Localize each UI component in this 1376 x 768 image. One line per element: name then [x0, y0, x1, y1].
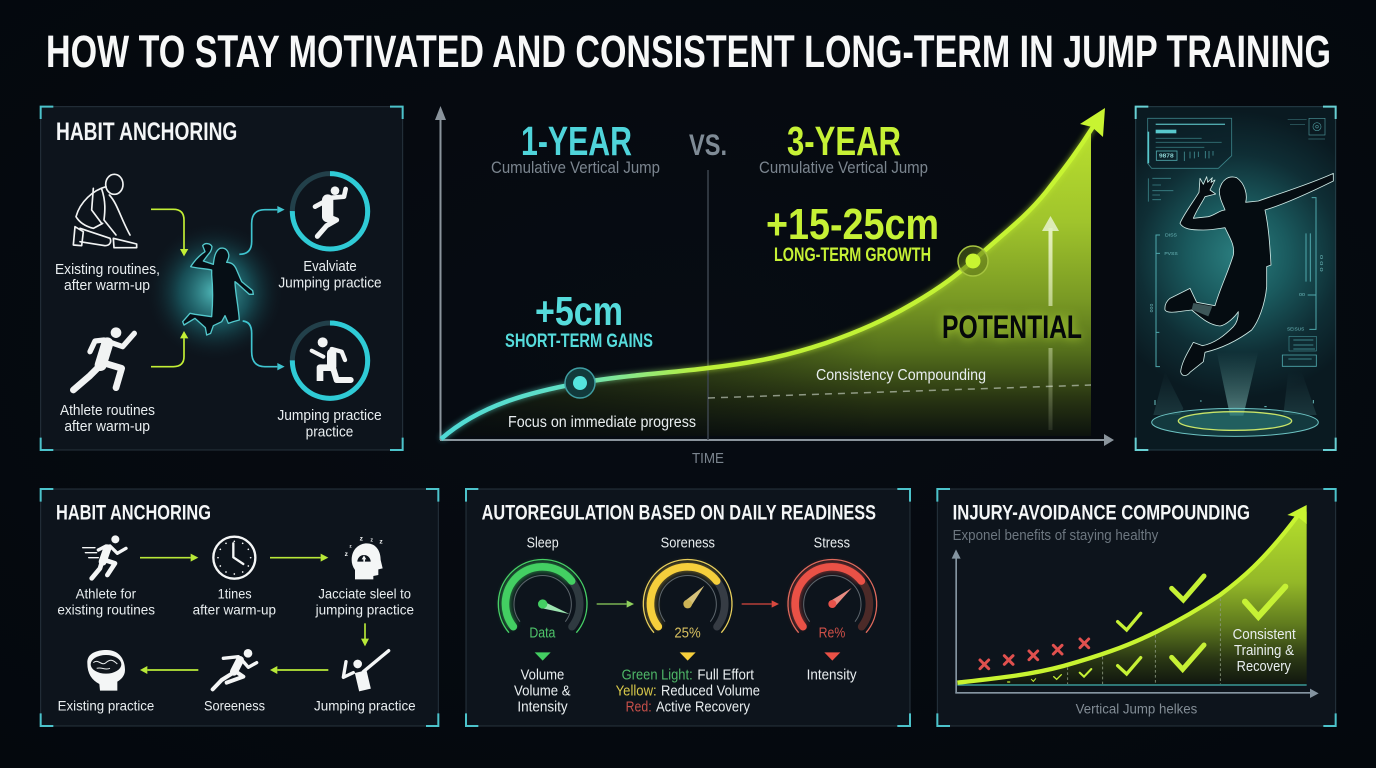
projector light beams [1153, 352, 1317, 416]
panel heading: INJURY-AVOIDANCE COMPOUNDING [953, 501, 1250, 524]
text: times after warm-up: 1tines [218, 585, 252, 601]
label: long-term growth: LONG-TERM GROWTH [774, 244, 931, 266]
panel heading: AUTOREGULATION BASED ON DAILY READINESS [482, 501, 876, 524]
chart axes [952, 549, 1319, 698]
panel: hero athlete hologram [1136, 107, 1336, 450]
text: volume and intensity [514, 667, 571, 716]
marker: one-year point [565, 368, 595, 398]
hud: left bracket [1156, 235, 1160, 367]
gauge labels: Sleep [527, 536, 559, 552]
gauge labels [527, 536, 850, 552]
hud labels: SEISUS [1287, 327, 1305, 333]
text: times after warm-up [193, 585, 276, 617]
text: athlete for existing routines: existing routines [57, 601, 155, 617]
note: focus on immediate progress: Focus on immediate progress [508, 414, 696, 431]
icon: head with brain [87, 650, 125, 691]
icon: head with gauge and sleep marks: z [360, 536, 364, 543]
axis label: Vertical Jump helkes [1076, 701, 1197, 716]
axis label: time: TIME [692, 450, 724, 467]
stat: +15-25cm: +15-25cm [766, 200, 939, 249]
arrow: jumper to evaluate [239, 206, 285, 254]
hud: top-right target [1288, 118, 1325, 139]
gauge labels: Soreness [661, 536, 715, 552]
arrow: jumper to practice [243, 321, 285, 370]
hud labels: 000 [1149, 303, 1155, 312]
gauge: stress [788, 559, 877, 633]
chart: area under curve [957, 512, 1307, 685]
text: athlete routines: Athlete routines [60, 402, 155, 419]
panel: habit anchoring (bottom left) [41, 489, 438, 726]
gauge: sleep [498, 559, 587, 633]
icon: athlete reaching up [343, 651, 389, 690]
icon: running figure [213, 649, 257, 689]
label: soreeness: Soreeness [204, 698, 265, 714]
text: consistent training and recovery: Training & [1234, 643, 1294, 659]
text: consistent training and recovery: Consistent [1233, 627, 1296, 643]
label: existing practice: Existing practice [58, 698, 155, 714]
icon: progress ring with lunge [292, 323, 368, 398]
text: times after warm-up: after warm-up [193, 601, 276, 617]
icon: head with gauge and sleep marks: z [370, 538, 373, 544]
text: intensity: Intensity [807, 667, 857, 683]
gauge labels: Stress [814, 536, 850, 552]
growth curve with arrow [441, 108, 1105, 439]
arrow: left [270, 666, 328, 674]
icon: head with gauge and sleep marks [345, 536, 383, 579]
stat: +5cm: +5cm [535, 288, 623, 334]
green checks [1008, 576, 1285, 682]
text: traffic light legend: Reduced Volume [661, 684, 760, 700]
text: consistent training and recovery [1233, 627, 1296, 675]
text: consistent training and recovery: Recovery [1237, 659, 1292, 675]
hud labels: 0 0 0 [1319, 255, 1325, 272]
text: evaluate jumping practice [278, 258, 382, 291]
gauge values [529, 625, 846, 641]
icon: clock [213, 537, 255, 579]
text: traffic light legend: Green Light: [622, 667, 693, 683]
text: existing routines: after warm-up [64, 277, 150, 294]
hud: top-left data card [1148, 118, 1232, 202]
label: short-term gains: SHORT-TERM GAINS [505, 330, 653, 352]
arrow: green to yellow [597, 600, 634, 608]
text: traffic light legend: Yellow: [616, 684, 657, 700]
text: volume and intensity: Intensity [517, 700, 568, 716]
arrow [270, 554, 328, 562]
text: jumping practice practice [277, 407, 382, 440]
arrow [140, 554, 198, 562]
gauge values: Data [529, 625, 555, 641]
text: existing routines [55, 261, 160, 294]
text: athlete for existing routines [57, 585, 155, 617]
indicator triangles [535, 652, 840, 661]
chart area fill [441, 130, 1091, 439]
hud labels: PVSS [1164, 251, 1178, 257]
icon: progress ring with jumper [292, 174, 368, 249]
arrow: yellow to red [742, 600, 779, 608]
gauge values: Re% [819, 625, 846, 641]
text: athlete for existing routines: Athlete for [76, 585, 136, 601]
panel: habit anchoring (top left) [41, 107, 403, 450]
sublabel: 3-year: Cumulative Vertical Jump [759, 158, 928, 177]
text: traffic light legend: Full Effort [697, 667, 754, 683]
marker: three-year point [958, 246, 988, 276]
icon: head with gauge and sleep marks: z [345, 551, 349, 558]
icon: jumping athlete silhouette [1165, 173, 1333, 376]
arrow: down [361, 623, 369, 646]
heading: 1-year: 1-YEAR [521, 118, 632, 164]
gauge: soreness [643, 559, 732, 633]
arrow: routine one to jumper [151, 209, 188, 256]
text: traffic light legend [616, 667, 760, 716]
potential up arrow [1042, 216, 1059, 430]
hud readout: 9878 [1159, 154, 1174, 160]
hud labels [1149, 233, 1325, 333]
heading: 3-year: 3-YEAR [787, 118, 901, 164]
panel: autoregulation [466, 489, 910, 726]
heading: vs: VS. [689, 129, 727, 162]
text: evaluate jumping practice: Jumping practice [278, 274, 382, 291]
icon: head with gauge and sleep marks: z [349, 544, 352, 549]
red crosses [980, 639, 1089, 669]
text: sleep to jumping practice: jumping practice [315, 601, 414, 617]
chart dashed consistency line [708, 385, 1091, 398]
chart: segment dividers [1068, 598, 1220, 684]
arrow: routine two to jumper [151, 331, 188, 367]
chart: 1-year vs 3-year cumulative vertical jump [435, 106, 1114, 467]
text: traffic light legend: Red: [626, 700, 652, 716]
icon: sprinter with speed lines [83, 535, 126, 578]
text: volume and intensity: Volume [521, 667, 564, 683]
panel subheading: Exponel benefits of staying healthy [953, 528, 1159, 544]
text: sleep to jumping practice: Jacciate sleel to [318, 585, 411, 601]
panel heading: HABIT ANCHORING [56, 118, 237, 146]
icon: running athlete [73, 327, 134, 390]
text: jumping practice practice: Jumping practice [277, 407, 382, 424]
hud: right bracket [1282, 198, 1316, 366]
label: potential: POTENTIAL [942, 309, 1082, 345]
gauge values: 25% [674, 625, 701, 641]
panel: injury-avoidance compounding [937, 489, 1336, 726]
hud labels: DISS [1165, 233, 1178, 239]
text: athlete routines [60, 402, 155, 435]
chart axes [435, 106, 1114, 446]
sublabel: 1-year: Cumulative Vertical Jump [491, 158, 660, 177]
hud labels: 00 [1299, 292, 1305, 298]
label: jumping practice: Jumping practice [314, 698, 416, 714]
text: jumping practice practice: practice [306, 423, 353, 440]
icon: athlete tying shoe [73, 174, 137, 248]
arrow: left [140, 666, 198, 674]
text: existing routines: Existing routines, [55, 261, 160, 278]
icon: glowing centre jumper [145, 222, 285, 362]
panel heading: HABIT ANCHORING [56, 501, 211, 524]
text: volume and intensity: Volume & [514, 684, 571, 700]
text: sleep to jumping practice [315, 585, 414, 617]
text: traffic light legend: Active Recovery [656, 700, 751, 716]
text: evaluate jumping practice: Evalviate [303, 258, 357, 275]
text: athlete routines: after warm-up [64, 418, 150, 435]
chart: growth curve with arrow [957, 505, 1307, 683]
holographic platform [1152, 400, 1318, 436]
note: consistency compounding: Consistency Compounding [816, 367, 986, 384]
icon: head with gauge and sleep marks: z [379, 538, 383, 545]
